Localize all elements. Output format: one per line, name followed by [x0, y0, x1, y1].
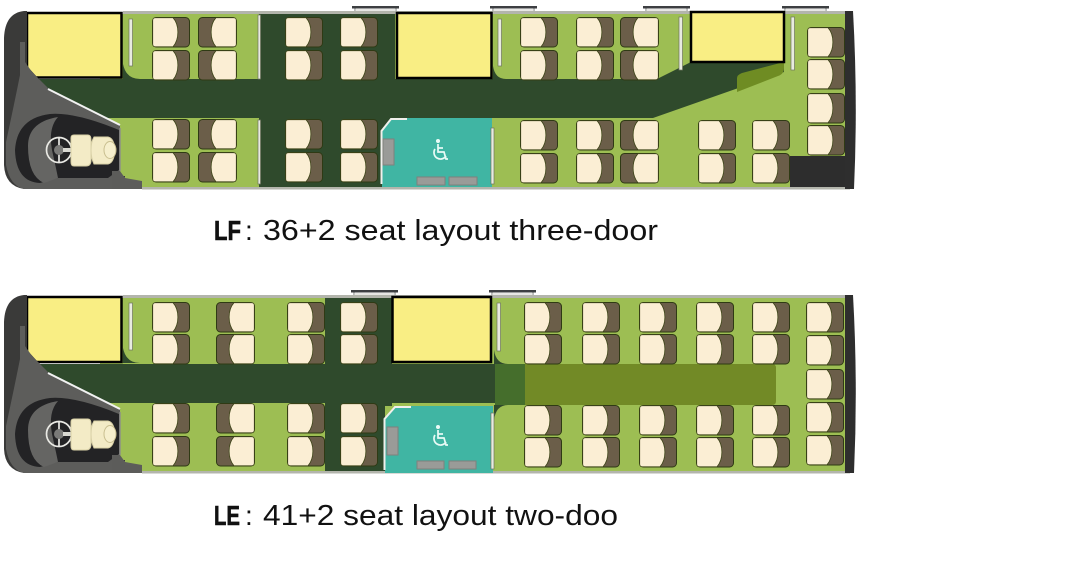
caption: LF: 36+2 seat layout three-door: [263, 215, 658, 247]
dark aisle: [30, 364, 495, 403]
rear bumper: [845, 11, 856, 189]
rear equipment block: [790, 156, 846, 187]
icon: wheelchair: [434, 425, 448, 445]
floor and hull: [100, 295, 850, 474]
mid green floor: [495, 364, 526, 405]
seats: [152, 18, 844, 183]
door steps: [352, 6, 829, 11]
caption: LE: 41+2 seat layout two-doo: [263, 500, 618, 532]
floor corners: [123, 348, 508, 420]
icon: wheelchair: [434, 139, 448, 159]
door steps: [351, 290, 536, 295]
dark standing area: [259, 14, 395, 187]
partitions: [129, 303, 500, 469]
caption: LF: LF: [214, 215, 241, 246]
door rail: [382, 119, 407, 184]
floor corners: [123, 64, 506, 79]
flip seats: [383, 139, 477, 185]
door panels: yellow: [27, 12, 784, 78]
flip seats: [387, 427, 476, 469]
dark aisle: [30, 62, 784, 118]
bus diagram: LF three-door layout: [4, 6, 856, 190]
olive raised aisle: [525, 364, 776, 405]
olive raised floor: [737, 62, 784, 92]
driver cab: [4, 295, 142, 473]
wheelchair area: [382, 118, 492, 187]
caption: LE: LE: [214, 500, 240, 531]
door panels: yellow: [27, 297, 491, 362]
rear bumper: [845, 295, 856, 473]
door rail: [384, 407, 411, 470]
partitions: [129, 15, 794, 184]
caption: LE: :: [245, 500, 253, 531]
driver cab: [4, 11, 142, 189]
bus diagram: LE two-door layout: [4, 290, 856, 474]
seats: [152, 302, 844, 467]
floor and hull: [100, 11, 850, 190]
caption: LF: :: [245, 215, 253, 246]
wheelchair area: [385, 406, 493, 473]
dark standing area: [325, 298, 392, 471]
